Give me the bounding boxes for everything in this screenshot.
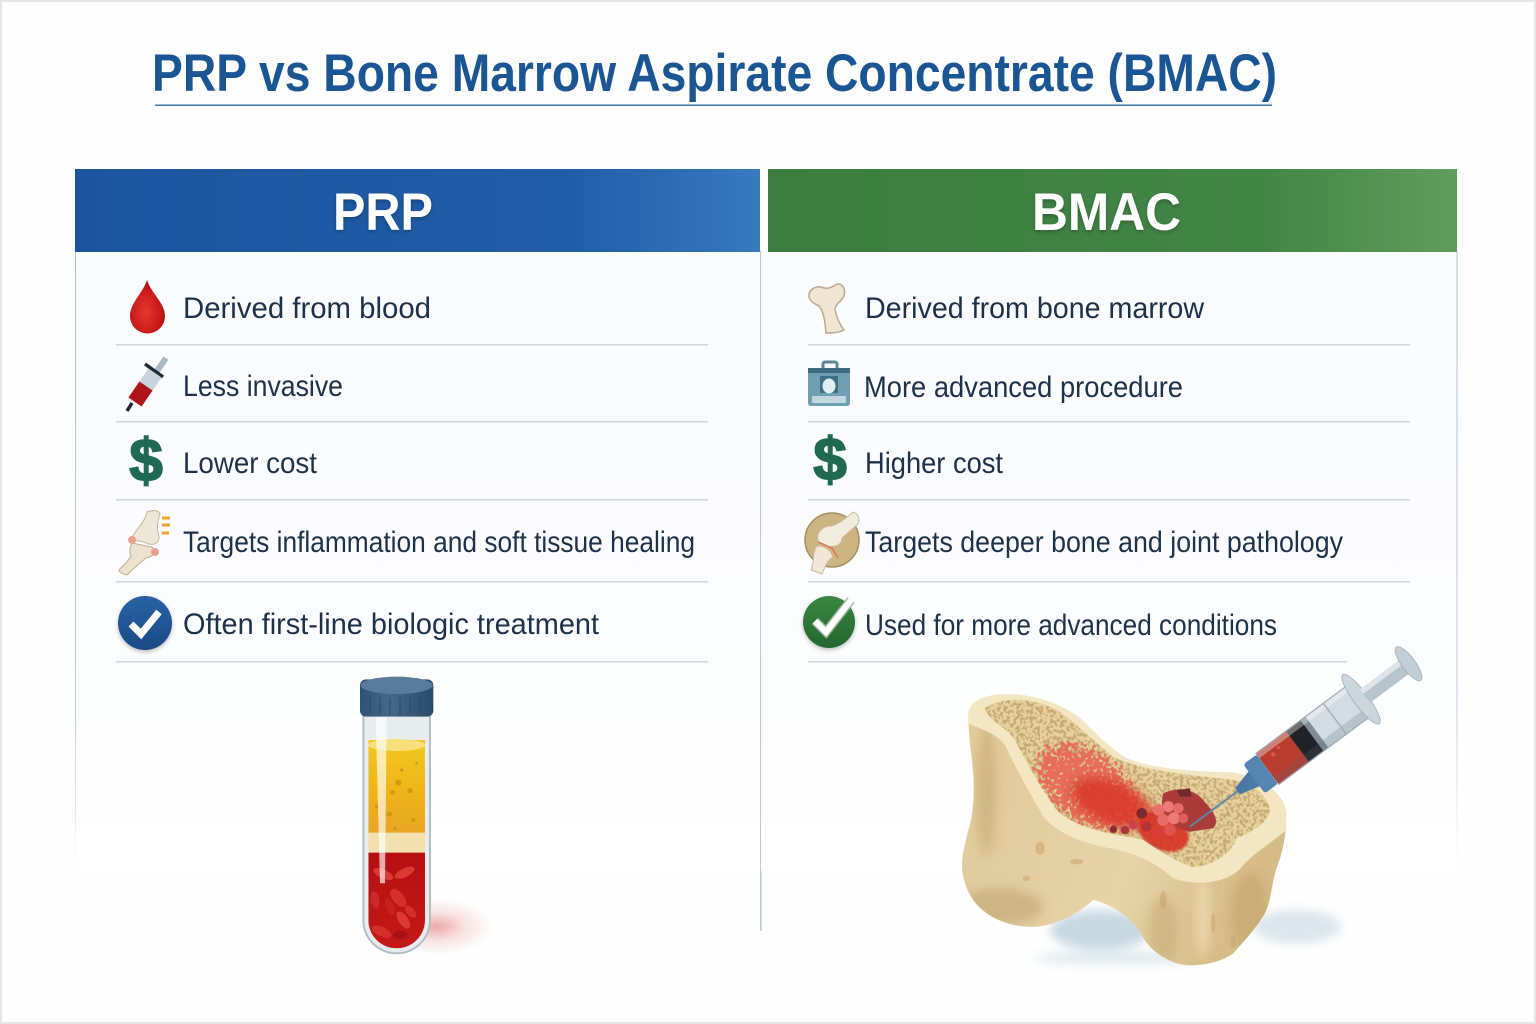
cut rim [968, 694, 1287, 883]
icon: dollar sign: $ [129, 427, 163, 494]
icon: dollar sign: $ [813, 426, 847, 493]
illustration: PRP test tube [360, 677, 493, 955]
plasma layer [368, 740, 425, 835]
row: less invasive: Less invasive [183, 370, 343, 403]
row: more advanced procedure [808, 362, 1183, 406]
BMAC header: BMAC [1032, 183, 1181, 242]
spongy marrow base [985, 700, 1270, 867]
row: targets deeper bone [805, 512, 1343, 574]
red marrow [1031, 738, 1191, 854]
plasma bubbles [375, 762, 418, 830]
row: derived from blood [130, 280, 431, 334]
row: more advanced procedure: More advanced procedure [864, 371, 1183, 404]
panel: PRP [75, 169, 762, 955]
red cell layer [368, 853, 425, 953]
red marrow glow [1068, 770, 1158, 837]
large syringe [1172, 635, 1432, 851]
BMAC header [768, 169, 1457, 252]
icon: medical case [808, 362, 850, 406]
title: PRP vs Bone Marrow Aspirate Concentrate (BMAC) [152, 44, 1277, 103]
row: derived from blood: Derived from blood [183, 292, 431, 325]
row: targets deeper bone: Targets deeper bone and joint pathology [865, 526, 1343, 559]
icon: syringe [127, 358, 166, 411]
PRP header [75, 169, 760, 252]
glass highlight [376, 717, 387, 883]
row: derived from bone marrow: Derived from bone marrow [865, 292, 1204, 325]
red marrow speckle [1031, 738, 1144, 834]
glass tube [363, 713, 430, 953]
icon: bone [809, 284, 845, 333]
buffy coat [368, 833, 425, 856]
panel: BMAC [761, 169, 1458, 965]
lesion cluster [1110, 788, 1216, 837]
icon: joint on tan disc [805, 512, 859, 574]
row: targets inflammation [119, 511, 695, 575]
icon: knee joint [119, 511, 170, 575]
row: higher cost [813, 426, 1004, 493]
row: first-line treatment: Often first-line biologic treatment [183, 608, 600, 641]
row: first-line treatment [118, 596, 600, 650]
icon: green check [803, 596, 855, 648]
plasma surface [368, 739, 425, 751]
spongy texture [985, 700, 1270, 867]
icon: blue check [118, 596, 172, 650]
row: higher cost: Higher cost [865, 447, 1004, 480]
PRP header: PRP [333, 183, 433, 242]
screw cap [360, 677, 433, 717]
blood splatter [380, 898, 493, 955]
row: lower cost [129, 427, 318, 494]
row: targets inflammation: Targets inflammation and soft tissue healing [183, 526, 695, 559]
row: advanced conditions [803, 596, 1277, 648]
row: lower cost: Lower cost [183, 447, 318, 480]
icon: blood drop [130, 280, 165, 334]
bone shading [957, 723, 1268, 963]
bone shadow [1033, 910, 1340, 965]
row: less invasive [127, 358, 343, 411]
illustration: bone with syringe [957, 635, 1432, 965]
bone body [962, 694, 1286, 965]
row: derived from bone marrow [809, 284, 1204, 333]
row: advanced conditions: Used for more advanced conditions [865, 609, 1277, 642]
